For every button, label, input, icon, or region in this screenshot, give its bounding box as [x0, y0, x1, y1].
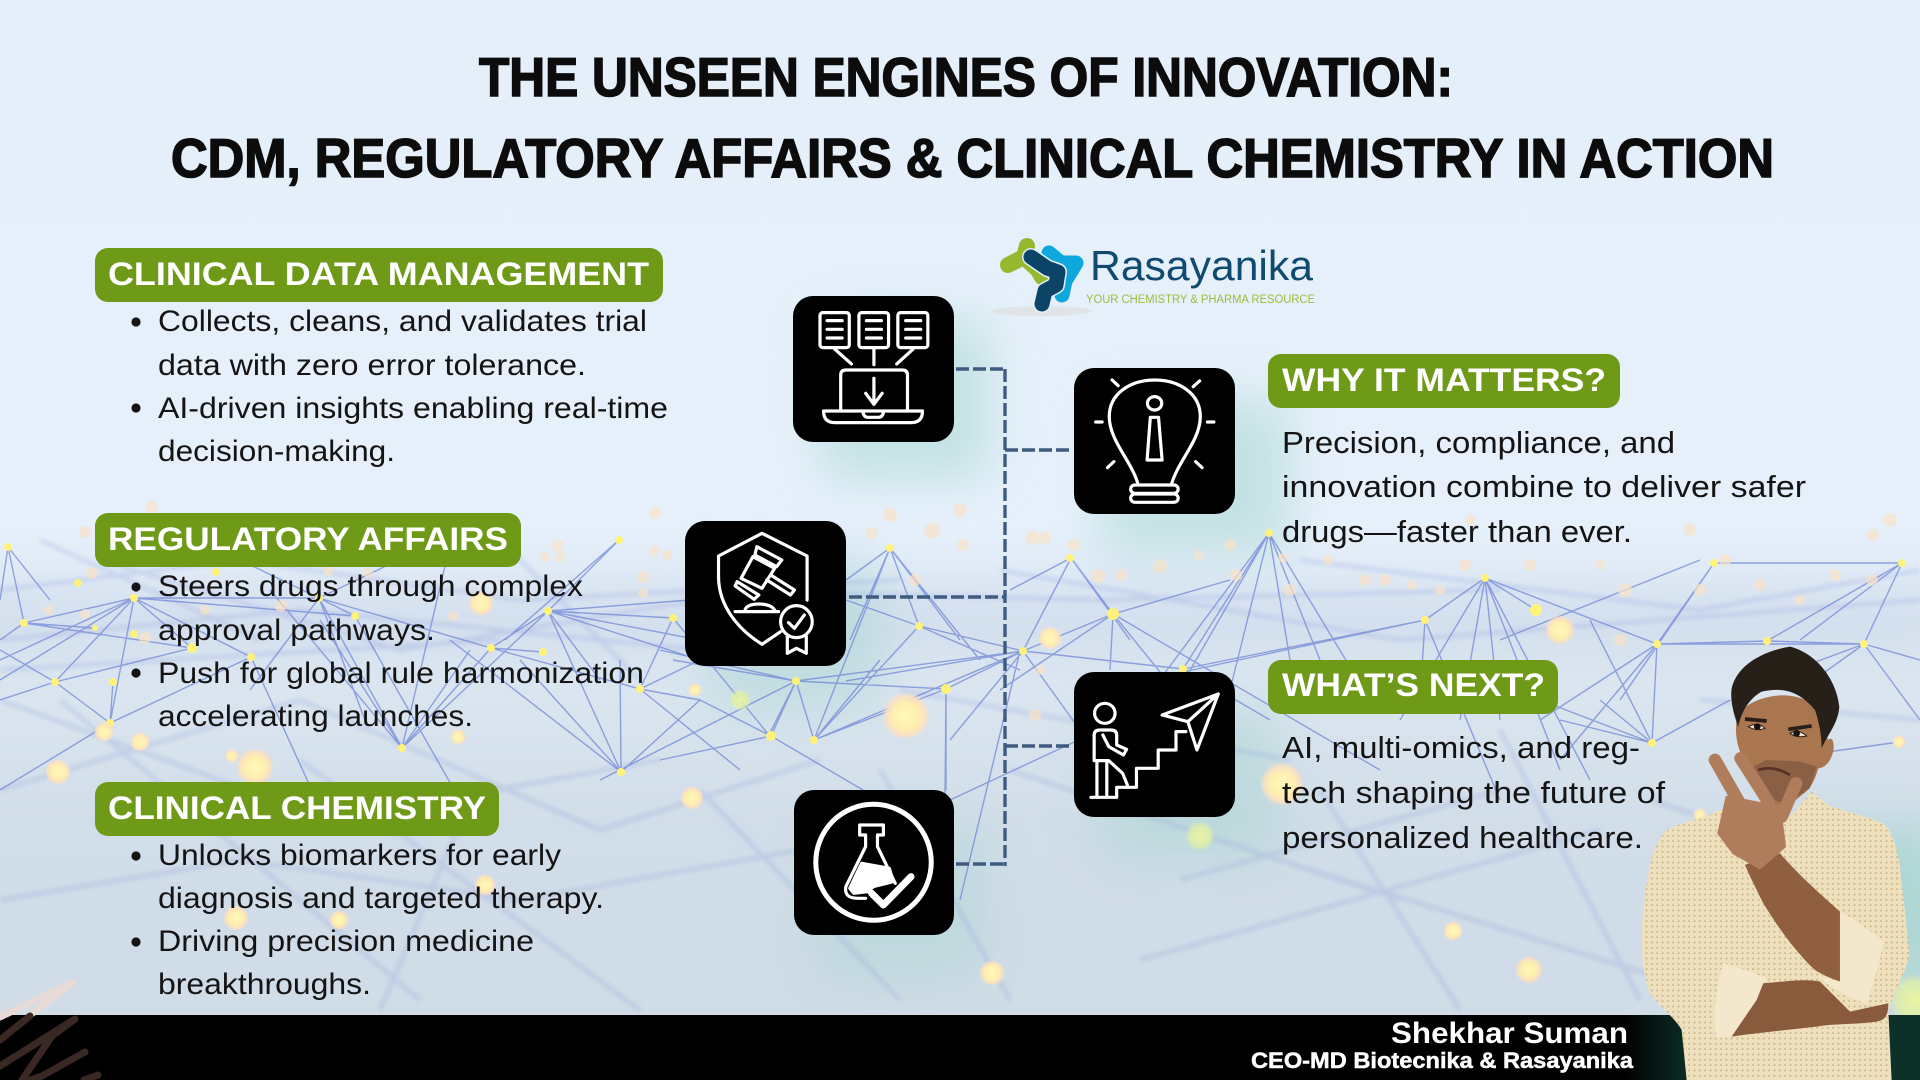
text: why it matters: innovation combine to deliver safer: [1282, 469, 1806, 504]
icon: flask with check: [794, 790, 954, 935]
text: why it matters: [1282, 425, 1806, 549]
bullets: regulatory affairs: Push for global rule harmonization: [158, 657, 644, 690]
bullets: clinical chemistry: [131, 839, 604, 1001]
bullets: clinical data management: Collects, cleans, and validates trial: [158, 305, 647, 338]
footer name: Shekhar Suman: [1391, 1017, 1628, 1050]
network: sharp lines: [0, 533, 1920, 900]
panel: what's next: [1268, 660, 1665, 855]
bullets: regulatory affairs: [131, 570, 644, 733]
heading: clinical data management: [95, 248, 663, 302]
text: what's next: personalized healthcare.: [1282, 820, 1643, 855]
bullets: regulatory affairs: Steers drugs through complex: [158, 570, 583, 603]
connector lines: [849, 369, 1072, 866]
stubble: [1753, 760, 1817, 803]
heading: why it matters: WHY IT MATTERS?: [1282, 362, 1606, 398]
footer name: CEO-MD Biotecnika & Rasayanika: [1251, 1048, 1634, 1073]
bullets: clinical chemistry: Driving precision medicine: [158, 925, 534, 958]
icon: regulatory shield and gavel: [685, 521, 846, 666]
bullets: regulatory affairs: accelerating launches.: [158, 700, 473, 733]
heading: what's next: [1268, 660, 1558, 714]
text: what's next: [1282, 730, 1665, 855]
text: why it matters: Precision, compliance, and: [1282, 425, 1675, 460]
icon: light bulb with info: [1074, 368, 1235, 514]
bullets: clinical data management: [131, 305, 668, 468]
heading: why it matters: [1268, 354, 1620, 408]
scribble decoration: [0, 983, 98, 1080]
bullets: clinical data management: AI-driven insights enabling real-time: [158, 392, 668, 425]
logo: Rasayanika: [992, 242, 1315, 316]
heading: clinical chemistry: CLINICAL CHEMISTRY: [108, 790, 486, 826]
panel: regulatory affairs: [95, 513, 644, 733]
pupils: [1754, 723, 1800, 737]
panel: clinical chemistry: [95, 782, 604, 1001]
heading: clinical chemistry: [95, 782, 499, 836]
brows: [1745, 719, 1812, 729]
network: blurred lines: [0, 540, 1920, 1010]
text: why it matters: drugs—faster than ever.: [1282, 514, 1632, 549]
heading: what's next: WHAT’S NEXT?: [1282, 667, 1545, 703]
title: THE UNSEEN ENGINES OF INNOVATION:: [479, 46, 1453, 108]
bullets: clinical chemistry: diagnosis and targeted therapy.: [158, 882, 604, 915]
text: what's next: AI, multi-omics, and reg-: [1282, 730, 1640, 765]
network: yellow nodes: [4, 529, 1906, 776]
panel: why it matters: [1268, 354, 1806, 549]
person portrait: [1642, 647, 1909, 1080]
cuffs: [1715, 912, 1883, 1038]
bullets: clinical chemistry: Unlocks biomarkers for early: [158, 839, 561, 872]
network: pale haze dots: [44, 501, 1897, 721]
shirt: [1642, 792, 1909, 1080]
hand: [1715, 758, 1796, 868]
logo: Rasayanika: YOUR CHEMISTRY & PHARMA RESOURCE: [1086, 294, 1315, 306]
bullets: clinical chemistry: breakthroughs.: [158, 968, 371, 1001]
heading: clinical data management: CLINICAL DATA MANAGEMENT: [108, 256, 650, 292]
logo: Rasayanika: Rasayanika: [1090, 242, 1314, 289]
background haze and teal glows: [0, 320, 1920, 990]
bullets: regulatory affairs: approval pathways.: [158, 614, 435, 647]
title: CDM, REGULATORY AFFAIRS & CLINICAL CHEMISTRY IN ACTION: [171, 127, 1774, 189]
panel: clinical data management: [95, 248, 668, 468]
footer name: [1251, 1017, 1634, 1073]
heading: regulatory affairs: REGULATORY AFFAIRS: [108, 521, 508, 557]
heading: regulatory affairs: [95, 513, 521, 567]
bullets: clinical data management: decision-making.: [158, 435, 395, 468]
face and ear: [1736, 695, 1834, 808]
eyes: [1748, 725, 1807, 737]
bullets: clinical data management: data with zero error tolerance.: [158, 349, 586, 382]
network: glowing orbs: [45, 590, 1920, 1026]
icon: climbing stairs with paper plane: [1074, 672, 1235, 817]
mouth: [1758, 768, 1790, 775]
title: [171, 46, 1774, 189]
upper arm: [1745, 853, 1841, 982]
footer bar: [0, 1015, 1920, 1080]
icon: data documents to laptop: [793, 296, 954, 442]
lower arm: [1732, 980, 1888, 1037]
hair: [1731, 647, 1839, 748]
text: what's next: tech shaping the future of: [1282, 775, 1665, 810]
